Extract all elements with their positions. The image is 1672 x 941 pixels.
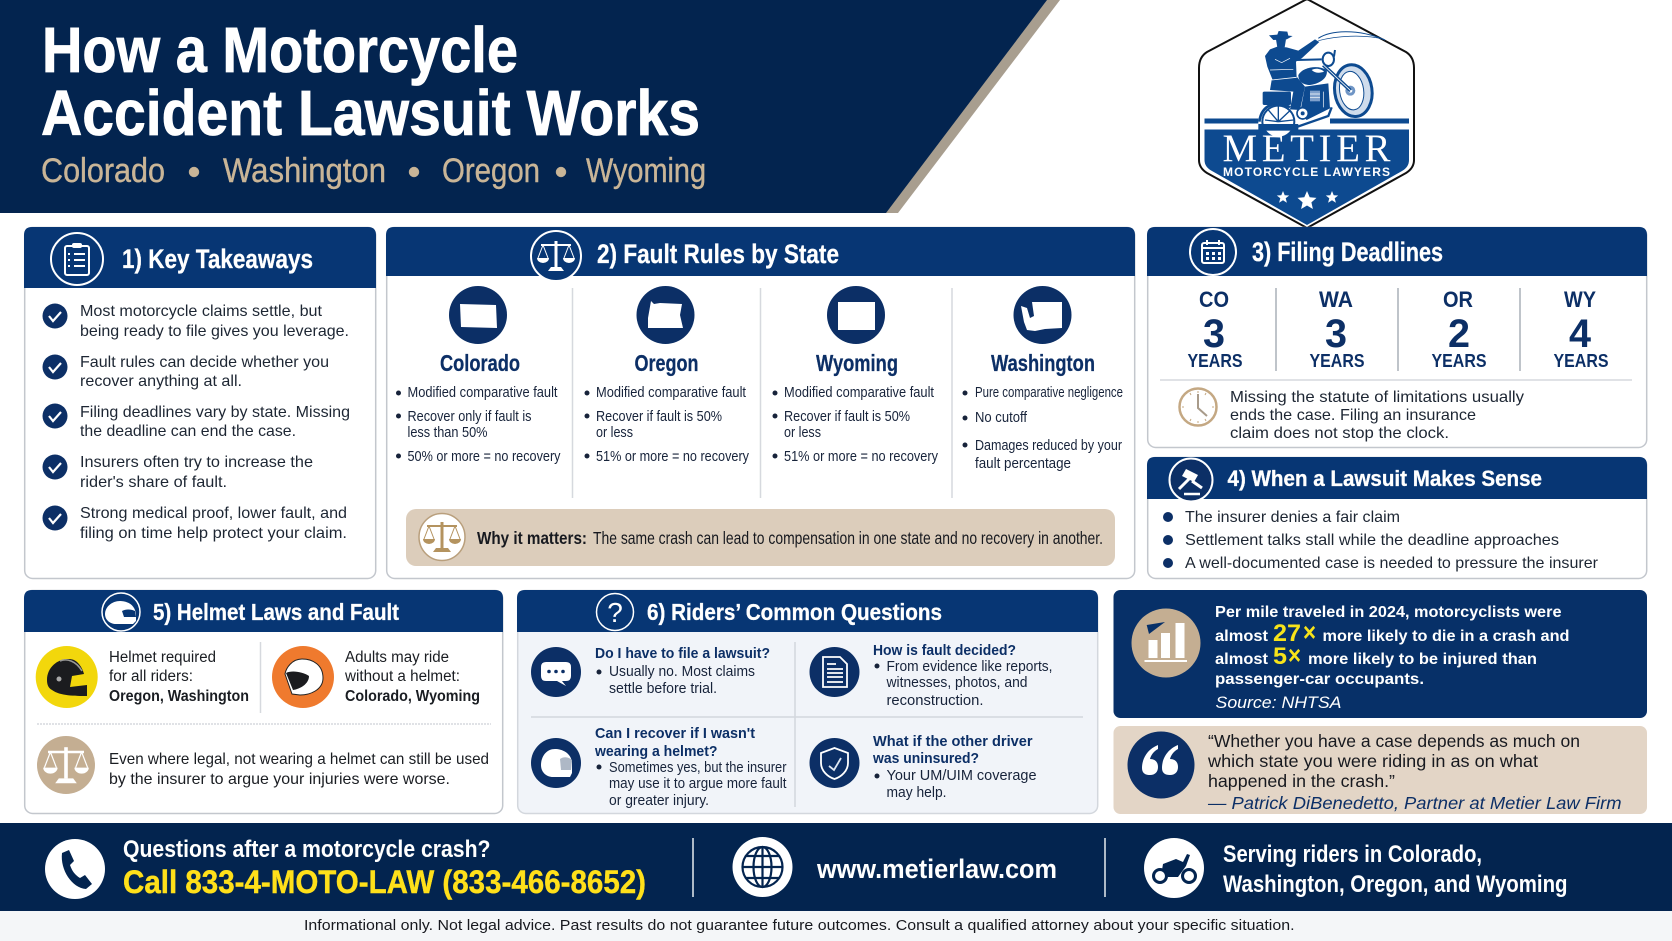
lawsuit reasons list: Settlement talks stall while the deadline approaches — [1185, 532, 1559, 549]
statistic text: Source: NHTSA — [1216, 693, 1342, 712]
subtitle: states — [41, 152, 706, 190]
callout: NHTSA statistic — [1114, 590, 1647, 718]
lawsuit reasons list: A well-documented case is needed to pressure the insurer — [1185, 555, 1599, 572]
disclaimer: Informational only. Not legal advice. Past results do not guarantee future outcomes. Consult a qualified attorney about your specific situation. — [304, 917, 1294, 934]
icon: Wyoming map — [827, 286, 885, 344]
icon: tan scales — [37, 736, 95, 794]
heading: 6) Riders’ Common Questions — [647, 599, 942, 625]
statistic text: × — [1288, 640, 1301, 670]
subtitle: states: Colorado — [41, 152, 165, 190]
deadline: Oregon: 2 — [1448, 312, 1470, 356]
column: Colorado: Colorado — [440, 350, 520, 376]
deadline: Colorado: 3 — [1203, 312, 1225, 356]
helmet required: for all riders: — [109, 668, 193, 685]
deadline: Washington — [1310, 287, 1364, 371]
deadline: Wyoming: 4 — [1569, 312, 1592, 356]
takeaways text: Filing deadlines vary by state. Missing — [80, 404, 350, 421]
heading: 2) Fault Rules by State — [597, 239, 839, 269]
icon: clock — [1180, 388, 1216, 426]
column: Wyoming — [772, 286, 938, 465]
icon: question mark: ? — [607, 597, 623, 628]
header banner — [0, 0, 1060, 213]
icon: globe — [732, 837, 792, 897]
quote text — [1207, 731, 1622, 813]
deadline note — [1230, 389, 1524, 442]
question: how is fault decided — [810, 642, 1052, 709]
title: Accident Lawsuit Works — [41, 77, 700, 149]
question: file a lawsuit: Usually no. Most claims — [609, 663, 755, 680]
statistic text: 27 — [1273, 620, 1301, 647]
question: file a lawsuit: Do I have to file a lawsuit? — [595, 645, 770, 662]
logo: Metier Motorcycle Lawyers: METIER — [1222, 127, 1390, 170]
deadline: Colorado — [1188, 287, 1242, 371]
column: Oregon: or less — [596, 424, 633, 441]
icon: white helmet on orange — [272, 646, 334, 708]
question: uninsured driver: What if the other driver — [873, 733, 1033, 750]
quote text: “Whether you have a case depends as much on — [1208, 731, 1580, 751]
icon: white helmet — [531, 738, 581, 788]
deadline note: Missing the statute of limitations usually — [1230, 389, 1524, 406]
subtitle: states: Oregon — [442, 152, 540, 190]
helmet required: Helmet required — [109, 649, 216, 666]
heading: 1) Key Takeaways — [122, 244, 313, 274]
column: Washington: Pure comparative negligence — [975, 384, 1123, 401]
statistic text: more likely to die in a crash and — [1322, 628, 1570, 645]
column: Oregon: Oregon — [634, 350, 698, 376]
phone contact — [45, 836, 646, 900]
question: file a lawsuit — [531, 645, 770, 697]
question: no helmet — [531, 725, 787, 809]
lawsuit reasons list: The insurer denies a fair claim — [1185, 509, 1400, 526]
question: no helmet: may use it to argue more fault — [609, 775, 787, 792]
deadline note: claim does not stop the clock. — [1230, 425, 1449, 442]
column: Wyoming: or less — [784, 424, 821, 441]
takeaways text: Strong medical proof, lower fault, and — [80, 505, 347, 522]
takeaways text: rider's share of fault. — [80, 474, 227, 491]
panel: 1) Key Takeaways — [24, 227, 376, 578]
deadline: Washington: WA — [1319, 287, 1353, 312]
deadline: Wyoming: WY — [1564, 287, 1596, 312]
quote text: which state you were riding in as on what — [1207, 751, 1538, 771]
column: Oregon: Recover if fault is 50% — [596, 408, 722, 425]
icon: shield — [810, 738, 860, 788]
panel: 4) When a Lawsuit Makes Sense — [1147, 457, 1647, 578]
question: uninsured driver: may help. — [886, 784, 946, 801]
column: Wyoming: Modified comparative fault — [784, 384, 935, 401]
question: no helmet: or greater injury. — [609, 792, 709, 809]
heading: 3) Filing Deadlines — [1252, 237, 1443, 267]
column: Oregon: Modified comparative fault — [596, 384, 747, 401]
deadline: Oregon: YEARS — [1432, 351, 1486, 371]
check icons — [42, 304, 68, 530]
helmet caution note: Even where legal, not wearing a helmet can still be used — [109, 751, 489, 768]
column: Washington: Washington — [991, 350, 1095, 376]
icon: phone — [45, 839, 105, 899]
takeaways text: Fault rules can decide whether you — [80, 354, 329, 371]
column: Colorado: less than 50% — [408, 424, 488, 441]
question: uninsured driver: Your UM/UIM coverage — [886, 767, 1036, 784]
icon: helmet badge — [102, 593, 140, 631]
service area: Washington, Oregon, and Wyoming — [1223, 871, 1568, 898]
icon: Washington map — [1014, 286, 1072, 344]
helmet optional: without a helmet: — [344, 668, 460, 685]
helmet optional: Colorado, Wyoming — [345, 688, 480, 705]
website: www.metierlaw.com — [816, 854, 1057, 884]
phone contact: Questions after a motorcycle crash? — [123, 836, 490, 863]
phone contact: Call 833-4-MOTO-LAW (833-466-8652) — [123, 864, 646, 900]
heading: 5) Helmet Laws and Fault — [153, 599, 399, 625]
icon: gold scales — [419, 514, 465, 560]
icon: document — [810, 647, 860, 697]
helmet required — [36, 646, 249, 708]
column: Wyoming: 51% or more = no recovery — [784, 448, 938, 465]
deadline: Wyoming — [1554, 287, 1608, 371]
question: no helmet: Can I recover if I wasn't — [595, 725, 755, 742]
column: Colorado: Recover only if fault is — [408, 408, 532, 425]
callout: attorney quote — [1114, 726, 1647, 814]
statistic text: Per mile traveled in 2024, motorcyclists were — [1215, 604, 1562, 621]
callout: why it matters: The same crash can lead to compensation in one state and no recovery in another. — [593, 528, 1103, 548]
statistic text: almost — [1215, 628, 1269, 645]
column: Wyoming: Wyoming — [816, 350, 898, 376]
column: Washington: No cutoff — [975, 409, 1028, 426]
deadline: Colorado: CO — [1199, 287, 1229, 312]
column: Colorado: Modified comparative fault — [408, 384, 558, 401]
helmet required: Oregon, Washington — [109, 688, 249, 705]
icon: Oregon map — [636, 286, 694, 344]
column: Oregon: 51% or more = no recovery — [596, 448, 749, 465]
rider and motorcycle — [1258, 31, 1385, 138]
column: Wyoming: Recover if fault is 50% — [784, 408, 910, 425]
helmet optional: Adults may ride — [345, 649, 449, 666]
helmet optional — [272, 646, 480, 708]
helmet caution note — [37, 736, 489, 794]
statistic text: more likely to be injured than — [1308, 651, 1537, 668]
column: Washington: Damages reduced by your — [975, 437, 1122, 454]
deadline note: ends the case. Filing an insurance — [1230, 407, 1476, 424]
column: Colorado — [396, 286, 561, 465]
icon: quotation mark — [1128, 732, 1194, 798]
quote text: happened in the crash.” — [1208, 771, 1395, 791]
logo: Metier Motorcycle Lawyers — [1199, 0, 1414, 228]
footer contact band — [0, 823, 1672, 911]
panel: 3) Filing Deadlines — [1147, 227, 1647, 448]
question: no helmet: wearing a helmet? — [594, 743, 718, 760]
heading: 4) When a Lawsuit Makes Sense — [1228, 466, 1542, 491]
takeaways text: the deadline can end the case. — [80, 423, 296, 440]
icon: motorcycle — [1144, 838, 1204, 898]
statistic text: 5 — [1273, 643, 1287, 670]
lawsuit reasons list — [1163, 509, 1599, 572]
quote text: — Patrick DiBenedetto, Partner at Metier Law Firm — [1207, 793, 1622, 813]
icon: black helmet on yellow — [36, 646, 98, 708]
takeaways text: Insurers often try to increase the — [80, 454, 313, 471]
subtitle: states: Washington — [223, 152, 386, 190]
statistic text: × — [1303, 617, 1316, 647]
question: uninsured driver: was uninsured? — [872, 750, 979, 767]
question: how is fault decided: From evidence like reports, — [886, 658, 1052, 675]
website — [732, 837, 1057, 897]
icon: question mark — [596, 594, 634, 630]
icon: gavel — [1170, 458, 1212, 502]
column: Oregon — [584, 286, 749, 465]
question: how is fault decided: How is fault decided? — [873, 642, 1016, 659]
takeaways text: being ready to file gives you leverage. — [80, 323, 349, 340]
takeaways text — [80, 303, 350, 542]
icon: chat bubble — [531, 647, 581, 697]
helmet caution note: by the insurer to argue your injuries were worse. — [109, 771, 450, 788]
icon: scales of justice — [531, 231, 581, 281]
icon: calendar — [1190, 229, 1236, 275]
deadline: Washington: 3 — [1325, 312, 1347, 356]
panel: 6) Riders' Common Questions — [517, 590, 1098, 814]
deadline: Washington: YEARS — [1310, 351, 1364, 371]
takeaways text: filing on time help protect your claim. — [80, 525, 347, 542]
question: uninsured driver — [810, 733, 1036, 801]
title: How a Motorcycle — [42, 14, 518, 86]
deadline: Oregon: OR — [1443, 287, 1473, 312]
logo: Metier Motorcycle Lawyers: MOTORCYCLE LAWYERS — [1223, 165, 1390, 179]
takeaways text: recover anything at all. — [80, 373, 242, 390]
deadline: Oregon — [1432, 287, 1486, 371]
question: file a lawsuit: settle before trial. — [609, 680, 717, 697]
icon: bar chart — [1132, 608, 1200, 678]
column: Colorado: 50% or more = no recovery — [408, 448, 561, 465]
panel: 2) Fault Rules by State — [386, 227, 1135, 578]
icon: Colorado map — [449, 286, 507, 344]
column: Washington — [962, 286, 1123, 472]
takeaways text: Most motorcycle claims settle, but — [80, 303, 323, 320]
icon: clipboard checklist — [51, 233, 103, 285]
statistic text: passenger-car occupants. — [1215, 671, 1424, 688]
callout: why it matters — [406, 509, 1115, 566]
deadline: Colorado: YEARS — [1188, 351, 1242, 371]
column: Washington: fault percentage — [975, 455, 1071, 472]
deadline: Wyoming: YEARS — [1554, 351, 1608, 371]
callout: why it matters: Why it matters: — [477, 528, 587, 548]
question: how is fault decided: witnesses, photos, and — [886, 674, 1028, 691]
service area — [1144, 838, 1568, 898]
panel: 5) Helmet Laws and Fault — [24, 590, 503, 814]
statistic text — [1215, 604, 1570, 712]
service area: Serving riders in Colorado, — [1223, 841, 1482, 868]
title — [41, 14, 700, 149]
question: how is fault decided: reconstruction. — [886, 692, 984, 709]
subtitle: states: Wyoming — [586, 152, 706, 190]
question: no helmet: Sometimes yes, but the insurer — [609, 759, 786, 776]
disclaimer — [0, 911, 1672, 941]
statistic text: almost — [1215, 651, 1269, 668]
